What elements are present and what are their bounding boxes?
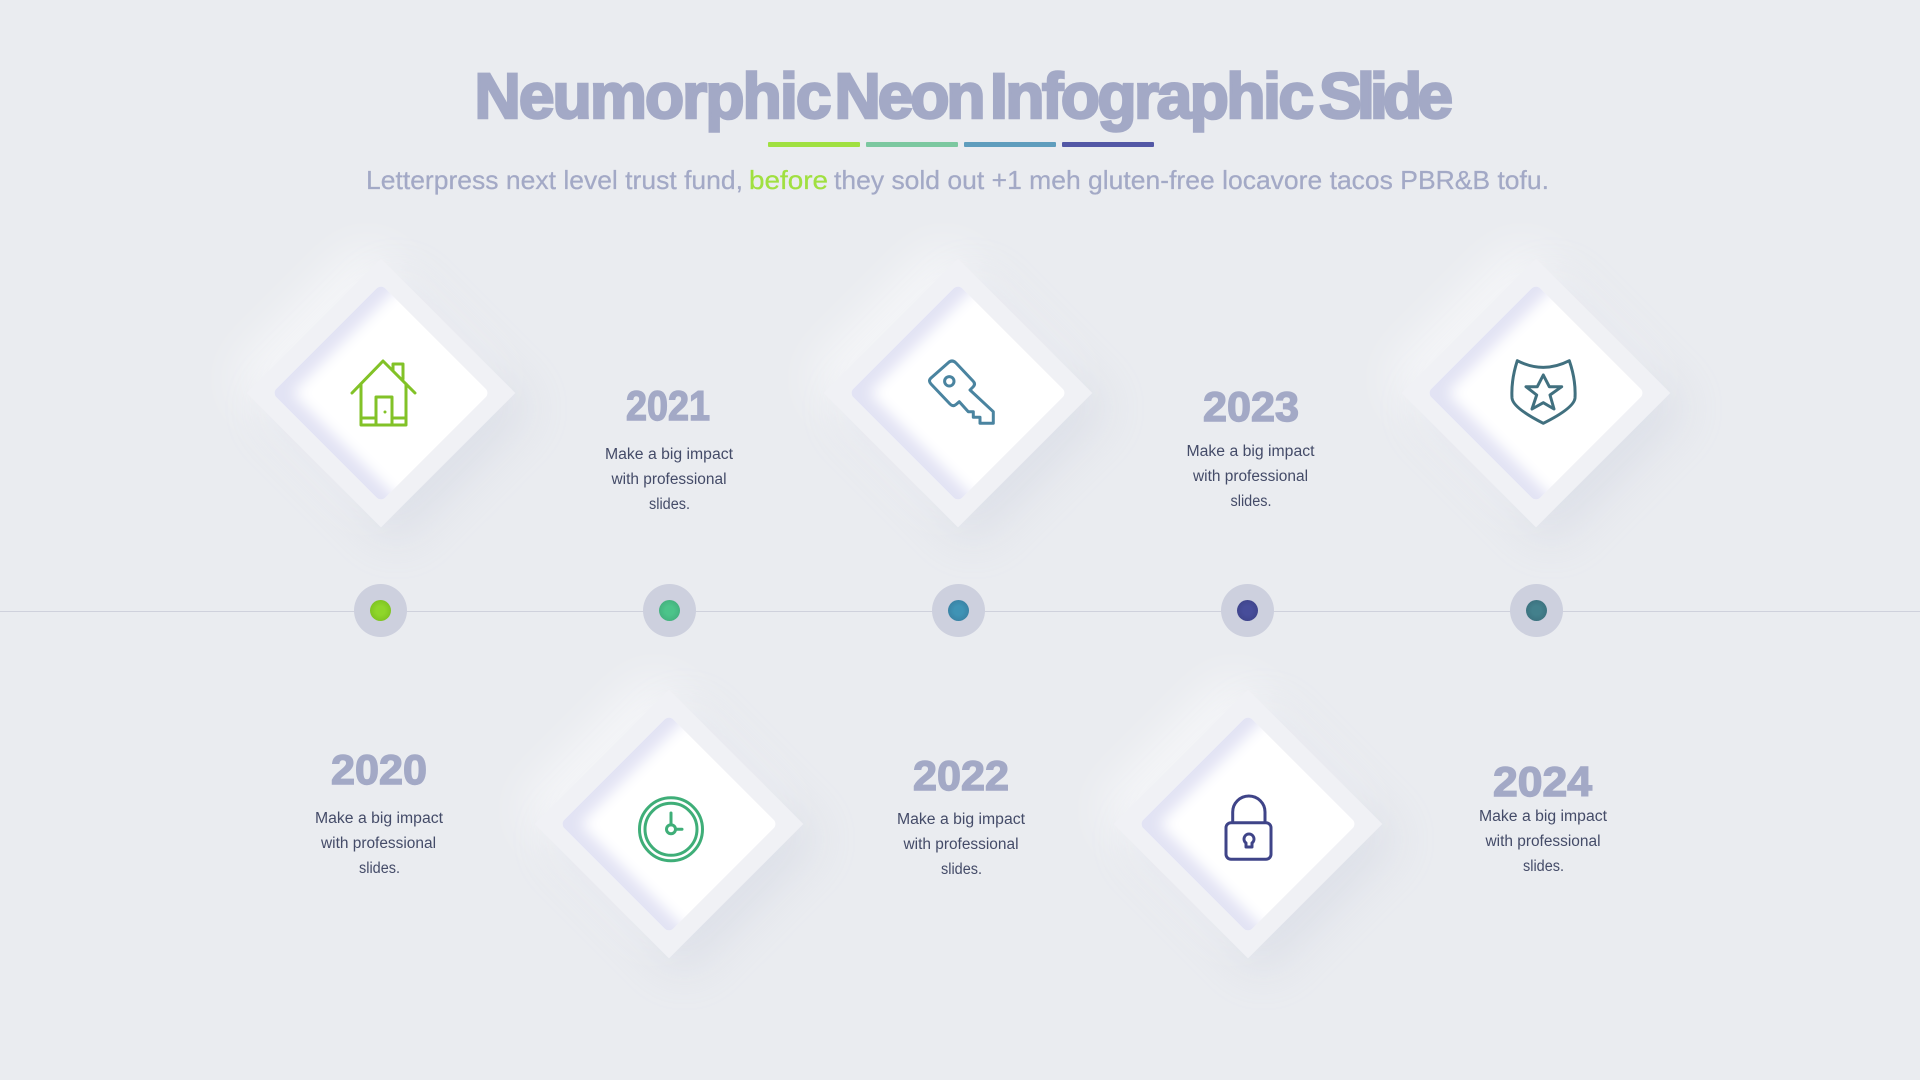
panel: 2024 shield diamond <box>1421 278 1666 522</box>
title underline bars <box>768 142 1154 147</box>
timeline dot: 2023 <box>1221 584 1274 637</box>
timeline line <box>0 610 1920 612</box>
panel: 2023 lock diamond <box>1133 709 1378 954</box>
text block: 2024: with professional <box>1485 833 1600 850</box>
icon: key <box>928 359 995 425</box>
title: Neumorphic <box>474 60 832 132</box>
text block: 2023: with professional <box>1192 468 1308 485</box>
text block: 2023: slides. <box>1230 493 1272 510</box>
text block: 2023: Make a big impact <box>1186 443 1315 460</box>
title: Neon <box>834 60 986 132</box>
text block: 2022: slides. <box>941 861 982 878</box>
text block: 2020: slides. <box>359 860 400 877</box>
subtitle: Letterpress next level trust fund, <box>366 165 743 195</box>
text block: 2024: 2024 <box>1493 758 1593 805</box>
subtitle: they sold out +1 meh gluten-free locavore tacos PBR&B tofu. <box>834 165 1549 195</box>
text block: 2022: with professional <box>903 836 1018 853</box>
text block: 2020: 2020 <box>331 746 427 793</box>
title: Slide <box>1319 60 1453 132</box>
timeline dot: 2021 <box>643 584 696 637</box>
text block: 2022: 2022 <box>913 752 1009 799</box>
panel: 2022 key diamond <box>843 278 1088 522</box>
subtitle: before <box>749 165 828 195</box>
icon: shield with star <box>1510 359 1577 425</box>
text block: 2021: Make a big impact <box>605 446 734 463</box>
panel: 2020 house diamond <box>266 278 511 522</box>
title <box>474 60 1453 133</box>
text block: 2022: Make a big impact <box>897 811 1026 828</box>
timeline dot: 2020 <box>354 584 407 637</box>
text block: 2023: 2023 <box>1203 383 1299 430</box>
icon: padlock <box>1224 794 1272 861</box>
icon: house <box>350 359 417 426</box>
icon: clock <box>638 796 704 862</box>
text block: 2021: slides. <box>649 496 690 513</box>
text block: 2020: with professional <box>320 835 436 852</box>
text block: 2020: Make a big impact <box>315 810 444 827</box>
timeline dot: 2022 <box>932 584 985 637</box>
text block: 2024: slides. <box>1523 858 1564 875</box>
text block: 2021: with professional <box>611 471 726 488</box>
subtitle <box>366 165 1549 195</box>
text block: 2024: Make a big impact <box>1479 808 1608 825</box>
panel: 2021 clock diamond <box>554 709 799 954</box>
text block: 2021: 2021 <box>626 382 710 429</box>
title: Infographic <box>990 60 1314 132</box>
timeline dot: 2024 <box>1510 584 1563 637</box>
